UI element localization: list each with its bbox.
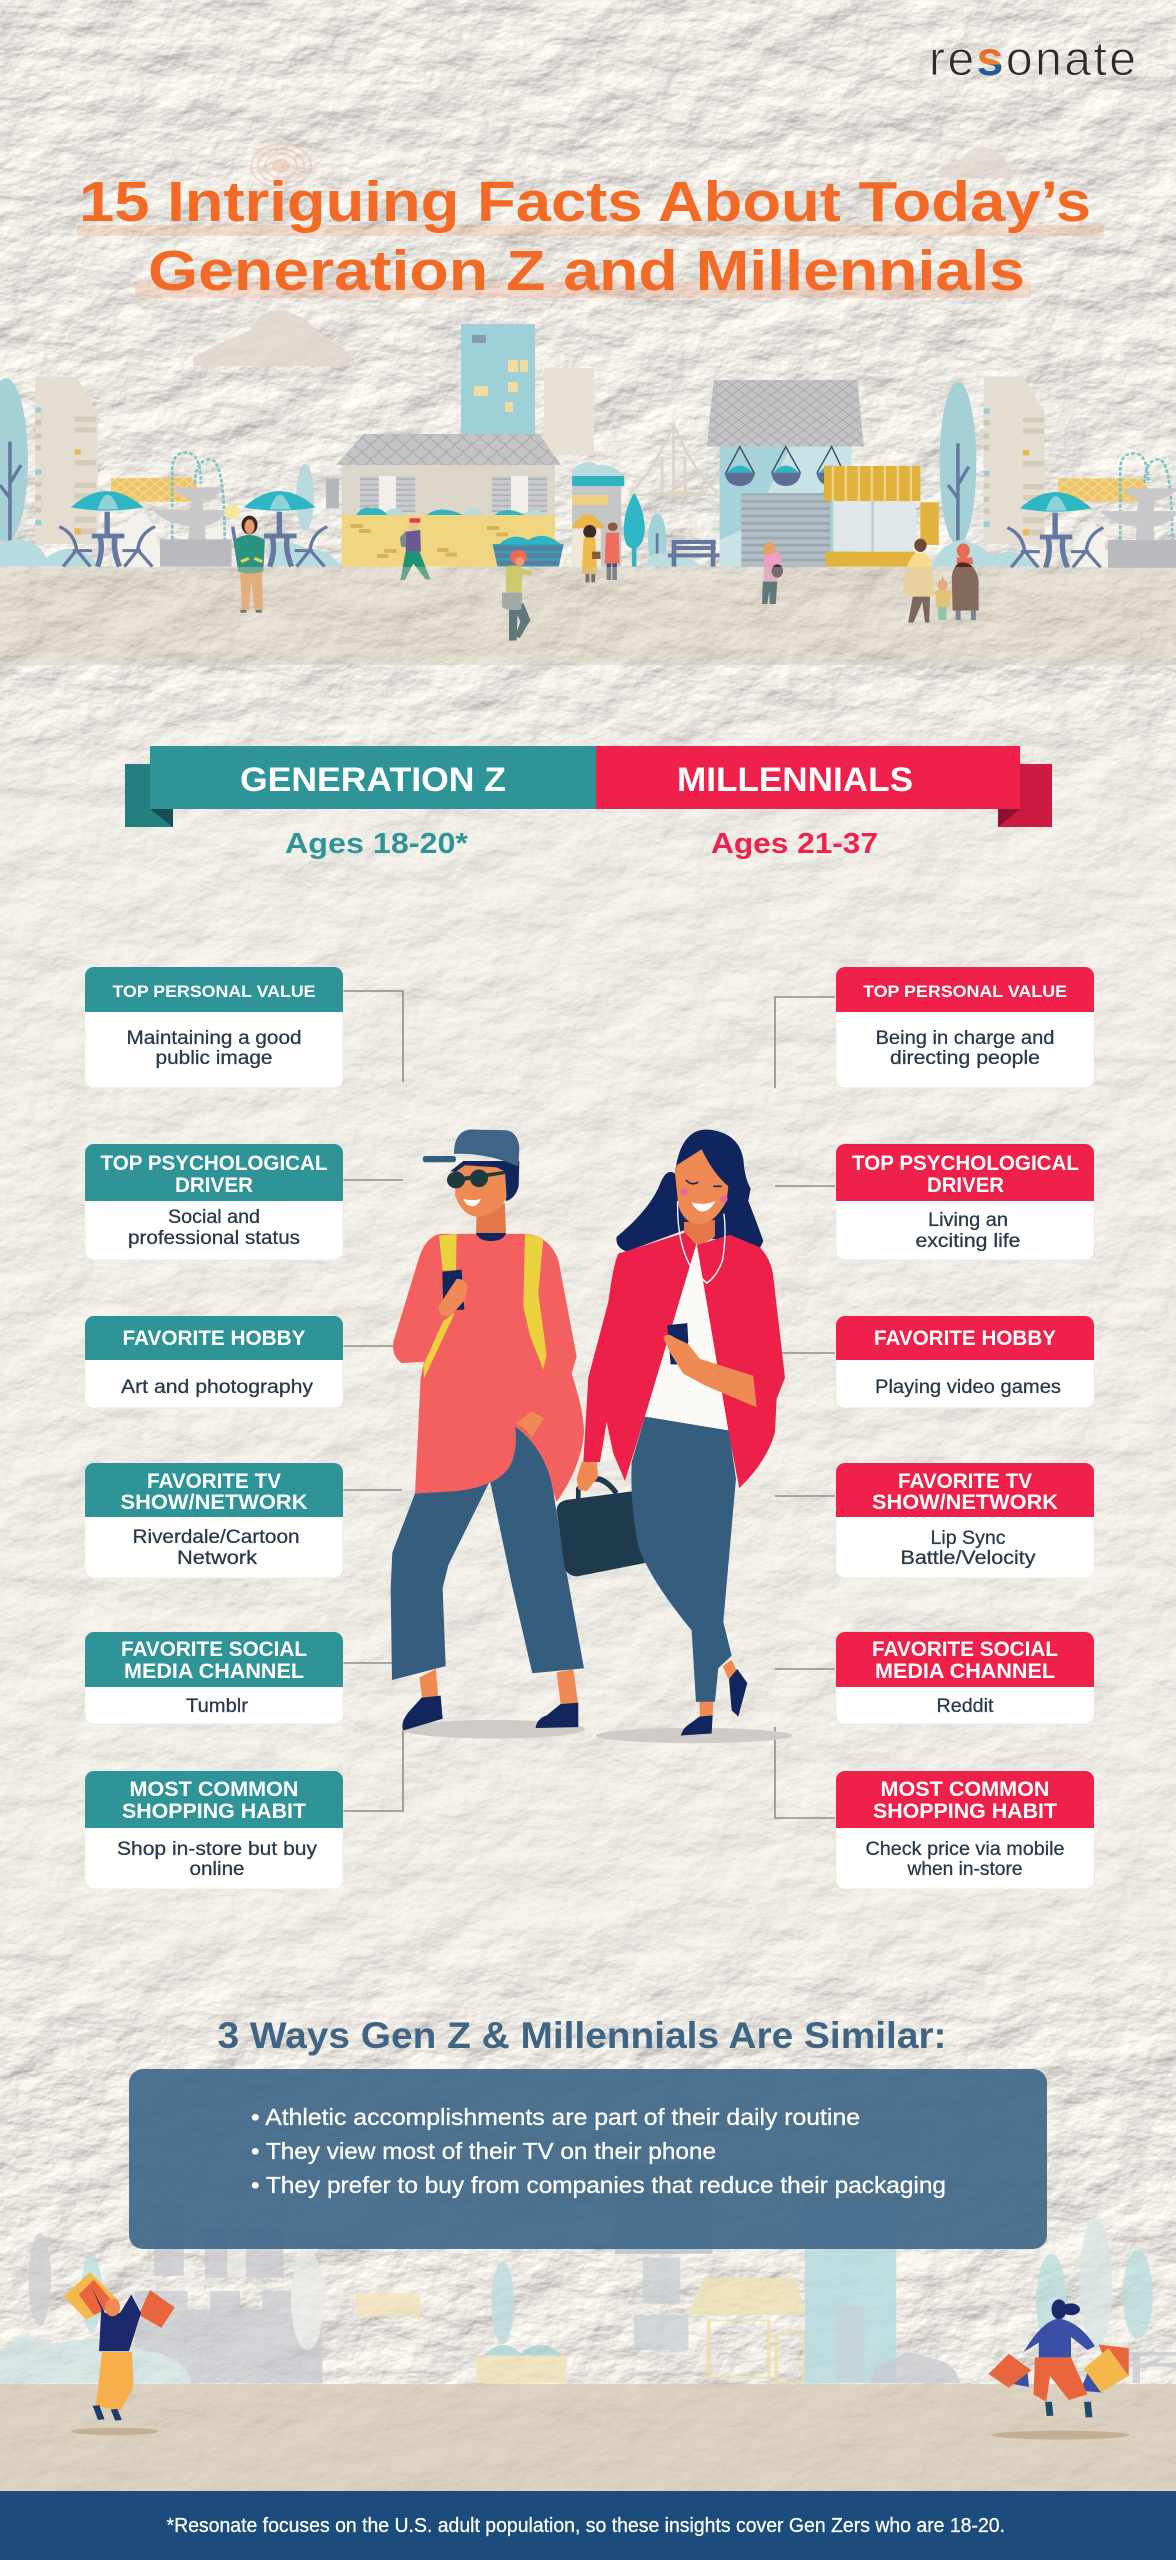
card: Gen Z favorite TV: Riverdale/Cartoon bbox=[132, 1527, 300, 1548]
hand on bag bbox=[577, 1462, 598, 1491]
cafe table and chairs left bbox=[59, 491, 155, 567]
fountain right bbox=[1100, 453, 1176, 568]
card: Millennials top personal value: TOP PERSONAL VALUE bbox=[863, 982, 1067, 1001]
faint sun behind title bbox=[251, 144, 311, 188]
card: Millennials favorite social media: FAVORITE SOCIAL bbox=[872, 1638, 1058, 1661]
bench bbox=[668, 540, 720, 567]
card: Millennials shopping habit: Check price via mobile bbox=[866, 1839, 1064, 1860]
card: Millennials favorite TV: SHOW/NETWORK bbox=[872, 1491, 1058, 1514]
card: Gen Z favorite TV bbox=[85, 1463, 343, 1578]
footer band bbox=[0, 2491, 1176, 2560]
hanging baskets bbox=[724, 447, 844, 486]
card: Gen Z top personal value: TOP PERSONAL VALUE bbox=[112, 982, 316, 1001]
person: walker bbox=[400, 518, 431, 580]
connector lines bbox=[343, 991, 835, 1818]
card: Millennials top psychological driver: TOP PSYCHOLOGICAL bbox=[852, 1152, 1079, 1175]
card: Millennials favorite social media bbox=[836, 1632, 1094, 1724]
card: Millennials favorite social media: Reddit bbox=[936, 1696, 994, 1717]
card: Millennials top psychological driver bbox=[836, 1144, 1094, 1260]
card: Millennials top psychological driver: DRIVER bbox=[927, 1174, 1004, 1197]
card: Millennials shopping habit: MOST COMMON bbox=[880, 1778, 1050, 1801]
title: 15 Intriguing Facts About Today’s bbox=[79, 170, 1091, 234]
calmer paper midsection bbox=[0, 660, 1176, 2060]
Generation Z ribbon: GENERATION Z bbox=[240, 761, 506, 799]
beige tower bbox=[544, 368, 594, 455]
panel: similarities bbox=[129, 2069, 1047, 2249]
card: Millennials favorite TV: Lip Sync bbox=[930, 1528, 1006, 1549]
cafe table right bbox=[1007, 492, 1103, 568]
face bbox=[455, 1165, 507, 1217]
shadows bbox=[402, 1720, 792, 1743]
faded right side bbox=[836, 2219, 1176, 2383]
card: Millennials favorite hobby: Playing video games bbox=[875, 1377, 1061, 1398]
card: Millennials favorite TV: Battle/Velocity bbox=[900, 1548, 1036, 1569]
left tower bbox=[35, 377, 98, 544]
people: family bbox=[903, 539, 979, 623]
right tower bbox=[984, 377, 1045, 544]
eyes bbox=[686, 1180, 722, 1186]
faded trees and buildings bbox=[0, 2204, 324, 2383]
person: woman with headphones bbox=[224, 505, 265, 613]
card: Gen Z top psychological driver: TOP PSYCHOLOGICAL bbox=[100, 1152, 328, 1175]
ankles bbox=[419, 1669, 578, 1707]
Generation Z ribbon bbox=[150, 746, 596, 809]
left tree bbox=[0, 378, 28, 544]
ribbon tails bbox=[125, 764, 1052, 827]
yellow brick wall bbox=[342, 507, 555, 567]
handbag bbox=[557, 1479, 645, 1576]
teal trees bbox=[624, 493, 666, 568]
age label: Gen Z: Ages 18-20* bbox=[285, 828, 469, 860]
card: Gen Z shopping habit: MOST COMMON bbox=[130, 1778, 298, 1801]
Millennials ribbon: MILLENNIALS bbox=[677, 761, 913, 799]
title: Generation Z and Millennials bbox=[148, 239, 1025, 303]
music note bbox=[224, 505, 240, 519]
bushes around bench bbox=[645, 553, 700, 567]
heading: similarities: 3 Ways Gen Z & Millennials Are Similar: bbox=[218, 2015, 946, 2056]
house bbox=[336, 434, 561, 517]
faded planter bbox=[356, 2261, 566, 2383]
footer band: *Resonate focuses on the U.S. adult population, so these insights cover Gen Zers who are 18-20. bbox=[166, 2515, 1005, 2537]
hand bbox=[438, 1279, 544, 1438]
hair bbox=[450, 1161, 519, 1201]
collar bbox=[476, 1233, 506, 1241]
illustration: faded bottom street scene bbox=[0, 2165, 1176, 2491]
card: Gen Z top psychological driver bbox=[85, 1144, 343, 1260]
card: Millennials shopping habit bbox=[836, 1771, 1094, 1889]
hair bbox=[616, 1129, 763, 1252]
backpack straps bbox=[423, 1234, 547, 1379]
right shop bbox=[707, 380, 939, 567]
card: Gen Z top personal value bbox=[85, 967, 343, 1088]
card: Gen Z shopping habit bbox=[85, 1771, 343, 1889]
lower legs and shoes bbox=[699, 1660, 737, 1717]
tall teal building bbox=[461, 324, 535, 434]
card: Gen Z favorite hobby: Art and photography bbox=[121, 1377, 314, 1398]
phone bbox=[667, 1323, 688, 1364]
bushes right bbox=[932, 540, 1039, 567]
card: Millennials favorite hobby: FAVORITE HOBBY bbox=[874, 1327, 1056, 1350]
shoes bbox=[402, 1696, 578, 1731]
face bbox=[675, 1149, 728, 1224]
card: Gen Z favorite social media: MEDIA CHANNEL bbox=[124, 1660, 304, 1683]
card: Millennials favorite social media: MEDIA CHANNEL bbox=[875, 1660, 1055, 1683]
smile bbox=[463, 1199, 481, 1206]
card: Gen Z favorite hobby: FAVORITE HOBBY bbox=[122, 1327, 306, 1350]
side shed bbox=[326, 478, 339, 508]
person: woman in pink bbox=[762, 542, 783, 604]
card: Millennials top personal value: directing people bbox=[890, 1048, 1040, 1069]
ground bbox=[0, 2384, 1176, 2491]
illustration: two young people walking bbox=[391, 1129, 792, 1743]
card: Gen Z top psychological driver: professional status bbox=[128, 1228, 300, 1249]
planter bbox=[493, 536, 564, 567]
card: Millennials favorite TV: FAVORITE TV bbox=[898, 1470, 1032, 1493]
card: Millennials favorite TV bbox=[836, 1463, 1094, 1578]
card: Gen Z favorite social media: Tumblr bbox=[186, 1696, 249, 1717]
right tree bbox=[940, 382, 976, 545]
smile bbox=[692, 1201, 716, 1212]
card: Gen Z top psychological driver: DRIVER bbox=[175, 1174, 253, 1197]
card: Gen Z favorite TV: FAVORITE TV bbox=[147, 1470, 281, 1493]
cap brim bbox=[423, 1156, 456, 1162]
cafe yellow roof bbox=[111, 477, 207, 502]
forearm and hand bbox=[663, 1335, 757, 1407]
neck bbox=[684, 1220, 715, 1247]
soft white shrubs bbox=[115, 513, 230, 567]
cap bbox=[454, 1129, 519, 1167]
list item 2: • They view most of their TV on their phone bbox=[251, 2138, 716, 2164]
cafe table and chairs right bbox=[233, 491, 327, 567]
title bbox=[77, 170, 1104, 303]
card: Gen Z favorite TV: Network bbox=[177, 1548, 258, 1569]
banner: generation headers bbox=[125, 746, 1052, 827]
card: Gen Z shopping habit: Shop in-store but buy bbox=[117, 1839, 318, 1860]
red jacket bbox=[583, 1233, 785, 1488]
bushes bbox=[0, 539, 341, 567]
trousers bbox=[391, 1426, 584, 1680]
white top bbox=[645, 1243, 728, 1430]
faded teal building bbox=[805, 2198, 896, 2383]
card: Millennials top personal value: Being in charge and bbox=[876, 1028, 1054, 1049]
card: Millennials shopping habit: when in-store bbox=[906, 1859, 1022, 1880]
card: Gen Z favorite hobby bbox=[85, 1316, 343, 1408]
card: Millennials top psychological driver: Living an bbox=[928, 1210, 1008, 1231]
ground bbox=[0, 567, 1176, 665]
card: Gen Z shopping habit: SHOPPING HABIT bbox=[122, 1800, 306, 1823]
card: Gen Z favorite TV: SHOW/NETWORK bbox=[120, 1491, 308, 1514]
faint cloud behind title bbox=[938, 147, 1013, 178]
illustration: street scene right half bbox=[571, 377, 1176, 623]
card: Gen Z favorite social media: FAVORITE SOCIAL bbox=[121, 1638, 307, 1661]
sunglasses bbox=[447, 1169, 505, 1188]
person: phone user bbox=[502, 550, 532, 641]
card: Millennials top personal value bbox=[836, 967, 1094, 1088]
card: Millennials shopping habit: SHOPPING HABIT bbox=[873, 1800, 1057, 1823]
neck bbox=[476, 1203, 506, 1234]
age label: Millennials: Ages 21-37 bbox=[711, 828, 878, 860]
illustration: street scene left half bbox=[0, 377, 564, 641]
list item 1: • Athletic accomplishments are part of their daily routine bbox=[251, 2104, 860, 2130]
Millennials ribbon bbox=[596, 746, 1020, 809]
man bbox=[391, 1129, 584, 1731]
cheeks bbox=[680, 1188, 728, 1203]
faded shop bbox=[615, 2165, 806, 2383]
logo: resonate: resonate bbox=[929, 33, 1136, 86]
phone bbox=[442, 1270, 464, 1310]
trousers bbox=[631, 1417, 736, 1702]
woman bbox=[557, 1129, 785, 1736]
tree behind second table bbox=[296, 464, 314, 531]
jumper left bbox=[64, 2272, 175, 2435]
women at door bbox=[582, 522, 620, 582]
card: Gen Z top personal value: public image bbox=[156, 1048, 272, 1069]
yellow roof right bbox=[1058, 478, 1154, 502]
soft white shrubs right bbox=[1070, 520, 1109, 568]
card: Gen Z favorite social media bbox=[85, 1632, 343, 1724]
card: Millennials favorite hobby bbox=[836, 1316, 1094, 1408]
fountain bbox=[152, 453, 232, 567]
jumper right bbox=[988, 2299, 1130, 2440]
small shop bbox=[571, 462, 624, 567]
list item 3: • They prefer to buy from companies that reduce their packaging bbox=[251, 2172, 946, 2198]
sweater bbox=[393, 1234, 584, 1502]
earphones bbox=[678, 1201, 725, 1283]
cloud bbox=[193, 310, 358, 366]
card: Millennials top psychological driver: exciting life bbox=[916, 1231, 1020, 1252]
card: Gen Z top psychological driver: Social and bbox=[168, 1207, 260, 1228]
bridge bbox=[630, 425, 718, 495]
card: Gen Z shopping habit: online bbox=[190, 1859, 244, 1880]
card: Gen Z top personal value: Maintaining a good bbox=[126, 1028, 302, 1049]
